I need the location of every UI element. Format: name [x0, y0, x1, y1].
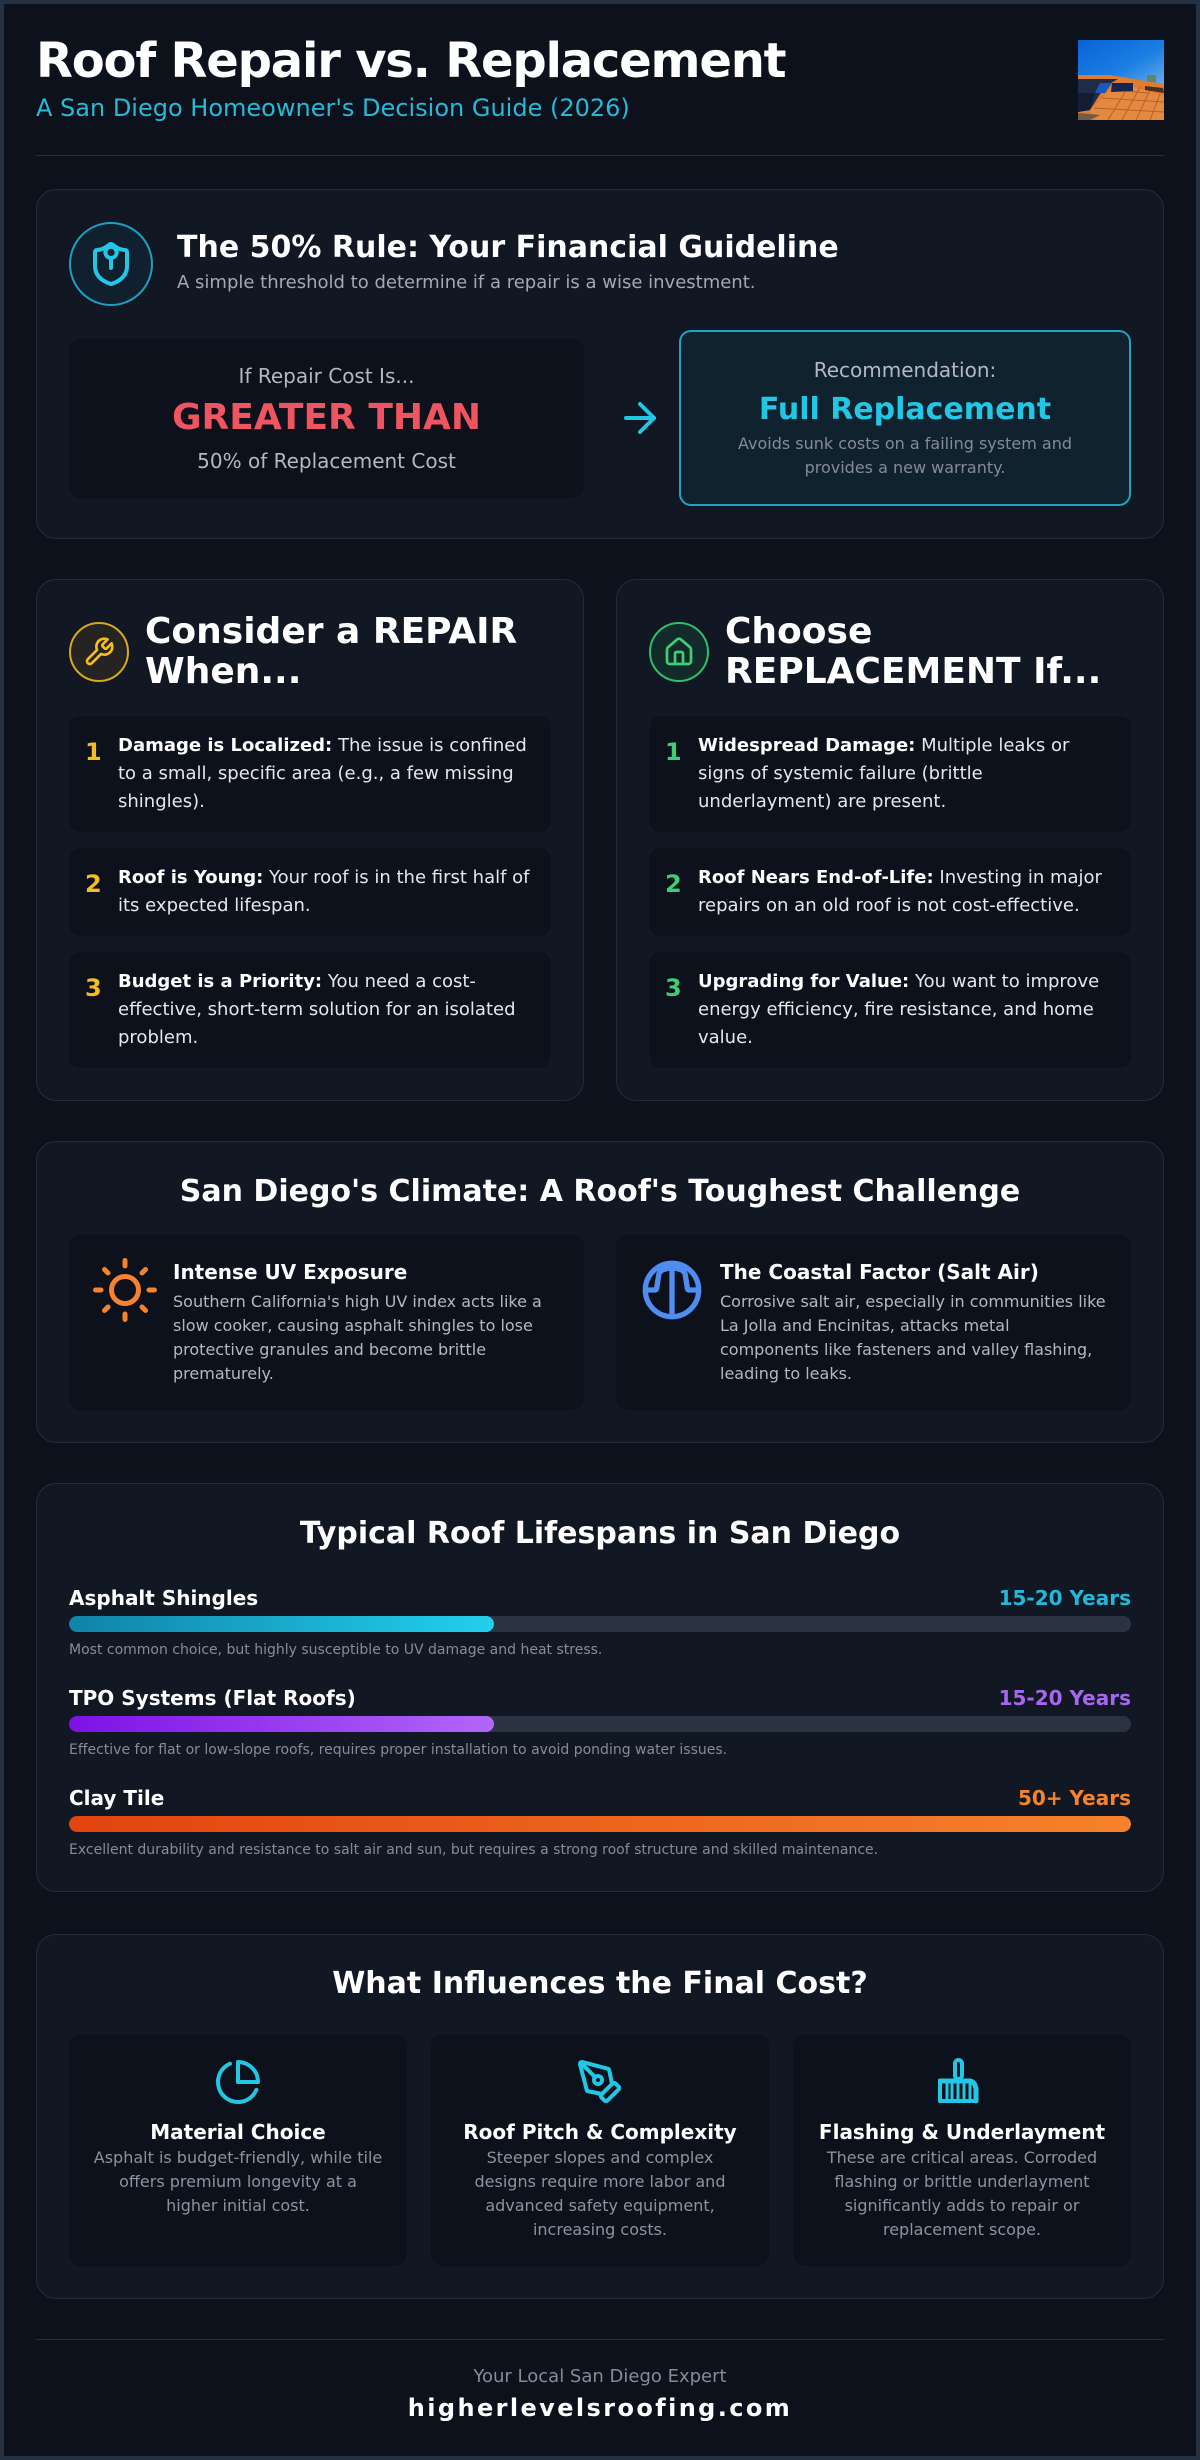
card text: replacement scope. [883, 2220, 1041, 2239]
card text: significantly adds to repair or [845, 2196, 1079, 2215]
item 3: Upgrading for Value: You want to improve [698, 971, 1099, 992]
panel: consider a repair [36, 579, 584, 1101]
heading: REPLACEMENT If... [725, 651, 1101, 692]
item 1 [649, 716, 1131, 832]
value: 50+ Years [1018, 1786, 1131, 1810]
item 3: Budget is a Priority: You need a cost- [118, 971, 476, 992]
row: TPO systems [69, 1686, 1131, 1758]
label: Clay Tile [69, 1786, 164, 1810]
value: 15-20 Years [999, 1586, 1131, 1610]
item 3: 3 [85, 974, 102, 1002]
item 1: 1 [85, 738, 102, 766]
condition box [69, 339, 584, 498]
recommendation note [738, 434, 1072, 477]
card text [94, 2148, 382, 2215]
item 2 [69, 848, 551, 936]
icon: shield [69, 222, 153, 306]
card title: Material Choice [150, 2120, 326, 2144]
card text: Asphalt is budget-friendly, while tile [94, 2148, 382, 2167]
item 1: Damage is Localized: The issue is confined [118, 735, 527, 756]
card: flashing and underlayment [793, 2034, 1131, 2266]
item 1: Widespread Damage: Multiple leaks or [698, 735, 1069, 756]
heading: San Diego's Climate: A Roof's Toughest Challenge [180, 1174, 1020, 1209]
heading: When... [145, 651, 301, 692]
subheading: A simple threshold to determine if a repair is a wise investment. [177, 272, 756, 293]
item 3 [649, 952, 1131, 1068]
card title: Roof Pitch & Complexity [463, 2120, 737, 2144]
card text: Southern California's high UV index acts like a [173, 1292, 542, 1311]
recommendation note: provides a new warranty. [805, 458, 1005, 477]
card: material choice [69, 2034, 407, 2266]
card text: leading to leaks. [720, 1364, 852, 1383]
card text: offers premium longevity at a [119, 2172, 357, 2191]
condition value: GREATER THAN [172, 397, 481, 438]
caption: Effective for flat or low-slope roofs, requires proper installation to avoid ponding water issues. [69, 1742, 727, 1758]
heading: Typical Roof Lifespans in San Diego [300, 1516, 900, 1551]
heading: What Influences the Final Cost? [332, 1966, 868, 2001]
card text: components like fasteners and valley flashing, [720, 1340, 1092, 1359]
item 1: underlayment) are present. [698, 791, 946, 812]
item 3: problem. [118, 1027, 198, 1048]
icon: house [649, 622, 709, 682]
card text: increasing costs. [533, 2220, 667, 2239]
item 1 [69, 716, 551, 832]
arrow [624, 402, 656, 434]
subtitle: A San Diego Homeowner's Decision Guide (2026) [36, 94, 630, 122]
value: 15-20 Years [999, 1686, 1131, 1710]
item 3: 3 [665, 974, 682, 1002]
recommendation value: Full Replacement [759, 392, 1051, 427]
item 3 [69, 952, 551, 1068]
card text: higher initial cost. [166, 2196, 310, 2215]
item 3: effective, short-term solution for an isolated [118, 999, 516, 1020]
row: clay tile [69, 1786, 1131, 1858]
bar [69, 1816, 1131, 1832]
icon: salt air [642, 1260, 702, 1320]
recommendation label: Recommendation: [814, 358, 996, 382]
card title: Flashing & Underlayment [819, 2120, 1105, 2144]
recommendation box [679, 330, 1131, 506]
footer divider [36, 2339, 1164, 2340]
card text [173, 1292, 542, 1383]
item 2: 2 [665, 870, 682, 898]
item 1: 1 [665, 738, 682, 766]
card text: Steeper slopes and complex [487, 2148, 713, 2167]
caption: Excellent durability and resistance to salt air and sun, but requires a strong roof structure and skilled maintenance. [69, 1842, 878, 1858]
item 1: signs of systemic failure (brittle [698, 763, 983, 784]
card text: These are critical areas. Corroded [827, 2148, 1097, 2167]
item 2: its expected lifespan. [118, 895, 311, 916]
heading: Consider a REPAIR [145, 611, 517, 652]
card text: flashing or brittle underlayment [834, 2172, 1090, 2191]
icon: pie chart [216, 2060, 260, 2104]
item 2: Roof is Young: Your roof is in the first half of [118, 867, 530, 888]
row: asphalt shingles [69, 1586, 1131, 1658]
heading [725, 611, 1101, 692]
panel: 50% rule [36, 189, 1164, 539]
caption: Most common choice, but highly susceptible to UV damage and heat stress. [69, 1642, 602, 1658]
icon: brush [938, 2058, 978, 2104]
panel: climate [36, 1141, 1164, 1443]
card text [720, 1292, 1106, 1383]
card: roof pitch [431, 2034, 769, 2266]
footer website: higherlevelsroofing.com [408, 2394, 792, 2422]
heading: Choose [725, 611, 872, 652]
icon: sun [93, 1258, 157, 1322]
card text [826, 2148, 1097, 2239]
card title: The Coastal Factor (Salt Air) [720, 1260, 1039, 1284]
card title: Intense UV Exposure [173, 1260, 407, 1284]
footer label: Your Local San Diego Expert [473, 2366, 727, 2387]
condition note: 50% of Replacement Cost [197, 449, 456, 473]
item 3: value. [698, 1027, 753, 1048]
bar [69, 1716, 1131, 1732]
panel: cost factors [36, 1934, 1164, 2299]
item 1: to a small, specific area (e.g., a few missing [118, 763, 514, 784]
condition label: If Repair Cost Is... [239, 364, 414, 388]
heading [145, 611, 517, 692]
header [36, 33, 1164, 122]
card text: La Jolla and Encinitas, attacks metal [720, 1316, 1010, 1335]
footer [408, 2366, 792, 2422]
card text: advanced safety equipment, [485, 2196, 715, 2215]
panel: choose replacement [616, 579, 1164, 1101]
label: Asphalt Shingles [69, 1586, 258, 1610]
card: UV exposure [69, 1234, 584, 1410]
title: Roof Repair vs. Replacement [36, 33, 785, 89]
label: TPO Systems (Flat Roofs) [69, 1686, 356, 1710]
item 2: Roof Nears End-of-Life: Investing in major [698, 867, 1102, 888]
card text: designs require more labor and [475, 2172, 725, 2191]
card: coastal factor [616, 1234, 1131, 1410]
card text: prematurely. [173, 1364, 274, 1383]
item 3: energy efficiency, fire resistance, and home [698, 999, 1094, 1020]
item 2: 2 [85, 870, 102, 898]
recommendation note: Avoids sunk costs on a failing system and [738, 434, 1072, 453]
heading: The 50% Rule: Your Financial Guideline [177, 230, 839, 265]
header divider [36, 155, 1164, 156]
card text: protective granules and become brittle [173, 1340, 486, 1359]
card text [475, 2148, 725, 2239]
item 2 [649, 848, 1131, 936]
panel: lifespans [36, 1483, 1164, 1892]
card text: Corrosive salt air, especially in communities like [720, 1292, 1106, 1311]
card text: slow cooker, causing asphalt shingles to lose [173, 1316, 533, 1335]
bar [69, 1616, 1131, 1632]
item 1: shingles). [118, 791, 205, 812]
icon: pen tool [578, 2060, 622, 2104]
icon: wrench [69, 622, 129, 682]
item 2: repairs on an old roof is not cost-effective. [698, 895, 1080, 916]
image: roof with solar panels [1078, 40, 1164, 120]
